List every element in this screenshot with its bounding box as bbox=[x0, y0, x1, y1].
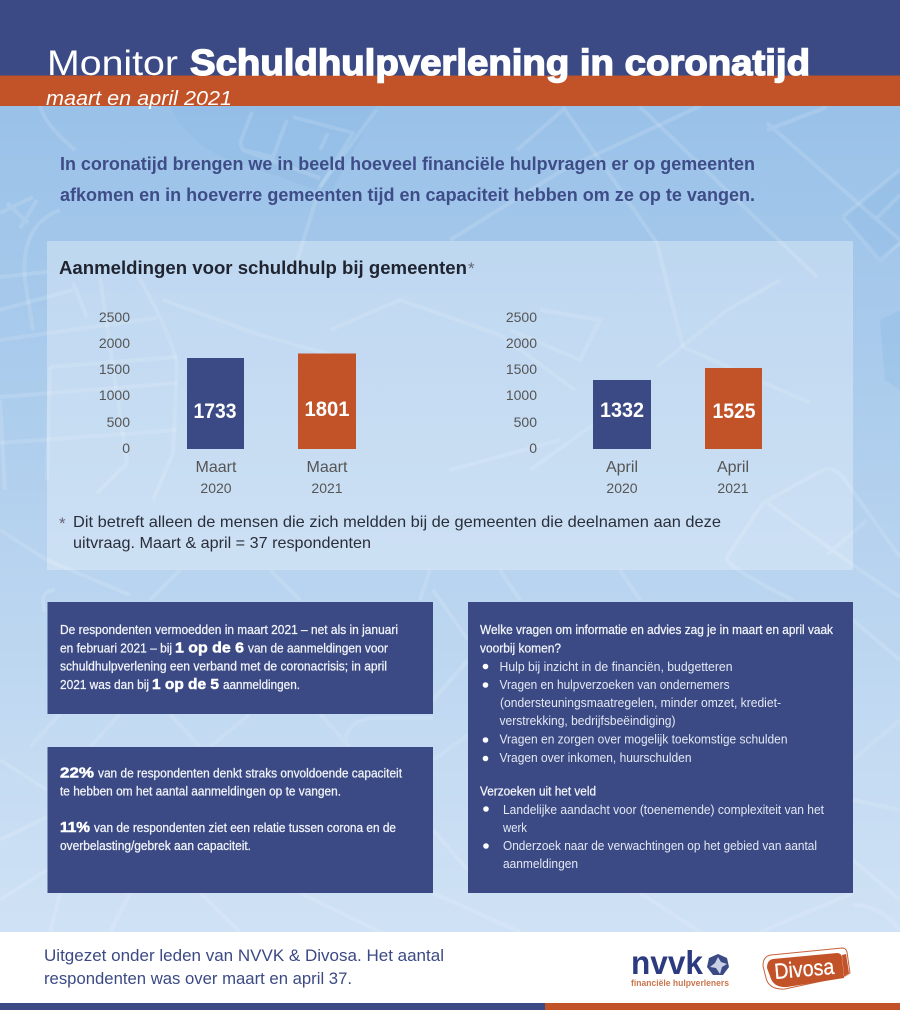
bar chart: april: 0 bbox=[529, 440, 537, 456]
bar chart: maart: 1801 bbox=[304, 398, 350, 421]
vragen heading: Welke vragen om informatie en advies zag je in maart en april vaak bbox=[480, 623, 834, 637]
verzoeken list: werk bbox=[502, 821, 528, 835]
verzoeken list: aanmeldingen bbox=[503, 857, 578, 871]
panel: 1 op de 6: De respondenten vermoedden in maart 2021 – net als in januari bbox=[60, 623, 398, 637]
footer text: respondenten was over maart en april 37. bbox=[44, 969, 352, 988]
vragen list: (ondersteuningsmaatregelen, minder omzet, krediet- bbox=[500, 696, 781, 710]
bar chart: maart: 1500 bbox=[99, 361, 130, 377]
panel: 1 op de 6: schuldhulpverlening een verband met de coronacrisis; in april bbox=[60, 660, 387, 674]
bar chart: april: 1000 bbox=[506, 387, 537, 403]
title: Monitor bbox=[47, 44, 178, 83]
bar chart: april: 2000 bbox=[506, 335, 537, 351]
bar chart: april: 500 bbox=[514, 414, 537, 430]
intro text: afkomen en in hoeverre gemeenten tijd en capaciteit hebben om ze op te vangen. bbox=[60, 184, 755, 205]
bar chart: maart bbox=[99, 309, 356, 496]
title: Schuldhulpverlening in coronatijd bbox=[190, 42, 810, 83]
logo: nvvk bbox=[631, 944, 729, 989]
panel: 1 op de 6: 2021 was dan bij bbox=[60, 678, 149, 692]
panel: 1 op de 6: 1 op de 6 bbox=[175, 640, 244, 656]
bar chart: maart: Maart bbox=[307, 459, 348, 476]
panel: capaciteit: te hebben om het aantal aanmeldingen op te vangen. bbox=[60, 784, 341, 798]
vragen list: verstrekking, bedrijfsbeëindiging) bbox=[500, 714, 676, 728]
logo: divosa: Divosa bbox=[773, 954, 836, 984]
verzoeken list: Landelijke aandacht voor (toenemende) complexiteit van het bbox=[503, 803, 824, 817]
intro text: In coronatijd brengen we in beeld hoeveel financiële hulpvragen er op gemeenten bbox=[60, 153, 755, 174]
bar chart: april: April bbox=[606, 459, 638, 476]
bottom bar bbox=[0, 1003, 900, 1010]
panel: 1 op de 6 bbox=[48, 602, 433, 714]
vragen heading bbox=[480, 623, 834, 656]
vragen list: Hulp bij inzicht in de financiën, budgetteren bbox=[500, 660, 733, 674]
subtitle: maart en april 2021 bbox=[46, 88, 232, 110]
panel: 1 op de 6: aanmeldingen. bbox=[223, 678, 300, 692]
chart heading: * bbox=[468, 259, 475, 278]
panel: capaciteit: overbelasting/gebrek aan capaciteit. bbox=[60, 839, 251, 853]
bar chart: maart: 2500 bbox=[99, 309, 130, 325]
panel: capaciteit: van de respondenten ziet een relatie tussen corona en de bbox=[94, 821, 396, 835]
bar chart: april: 2020 bbox=[606, 480, 638, 496]
verzoeken list bbox=[483, 803, 824, 871]
bar chart: april: April bbox=[717, 459, 749, 476]
bar chart: maart: 1000 bbox=[99, 387, 130, 403]
bar chart: april: 1332 bbox=[600, 399, 644, 422]
panel: vragen en verzoeken bbox=[468, 602, 853, 893]
verzoeken list: Onderzoek naar de verwachtingen op het gebied van aantal bbox=[503, 839, 817, 853]
bar chart: maart: 500 bbox=[107, 414, 130, 430]
footer bbox=[0, 932, 900, 1003]
footnote: * bbox=[59, 514, 66, 533]
panel: capaciteit: 22% bbox=[60, 764, 94, 782]
logo: nvvk: financiële hulpverleners bbox=[631, 978, 729, 989]
footer text: Uitgezet onder leden van NVVK & Divosa. Het aantal bbox=[44, 946, 444, 965]
panel: 1 op de 6: en februari 2021 – bij bbox=[60, 642, 172, 656]
bar chart: maart: 0 bbox=[122, 440, 130, 456]
bar chart: maart: Maart bbox=[196, 459, 237, 476]
logo: nvvk: nvvk bbox=[631, 944, 704, 981]
verzoeken heading: Verzoeken uit het veld bbox=[480, 784, 596, 798]
intro text bbox=[60, 153, 755, 205]
footnote bbox=[59, 514, 721, 552]
bar chart: maart: 2020 bbox=[200, 480, 232, 496]
bar chart: april: 2021 bbox=[717, 480, 749, 496]
footnote: uitvraag. Maart & april = 37 respondenten bbox=[73, 535, 371, 552]
vragen list bbox=[483, 660, 788, 765]
chart heading: Aanmeldingen voor schuldhulp bij gemeenten bbox=[59, 257, 467, 278]
vragen list: Vragen en zorgen over mogelijk toekomstige schulden bbox=[500, 732, 788, 746]
bar chart: april bbox=[506, 309, 762, 496]
panel: capaciteit: 11% bbox=[60, 819, 90, 836]
header band bbox=[0, 0, 900, 106]
panel: 1 op de 6: van de aanmeldingen voor bbox=[248, 642, 388, 656]
panel: aanmeldingen chart bbox=[47, 241, 853, 570]
vragen heading: voorbij komen? bbox=[480, 642, 561, 656]
vragen list: Vragen over inkomen, huurschulden bbox=[500, 751, 692, 765]
bar chart: maart: 2021 bbox=[311, 480, 343, 496]
bar chart: april: 1525 bbox=[712, 400, 756, 423]
footer text bbox=[44, 946, 444, 988]
panel: 1 op de 6: 1 op de 5 bbox=[152, 676, 219, 693]
vragen list: Vragen en hulpverzoeken van ondernemers bbox=[500, 678, 730, 692]
panel: capaciteit bbox=[48, 747, 433, 893]
bar chart: april: 1500 bbox=[506, 361, 537, 377]
footnote: Dit betreft alleen de mensen die zich meldden bij de gemeenten die deelnamen aan deze bbox=[73, 514, 721, 531]
bar chart: maart: 2000 bbox=[99, 335, 130, 351]
bar chart: april: 2500 bbox=[506, 309, 537, 325]
panel: capaciteit: van de respondenten denkt straks onvoldoende capaciteit bbox=[98, 766, 402, 780]
logo: divosa bbox=[763, 948, 850, 989]
bar chart: maart: 1733 bbox=[194, 400, 236, 423]
